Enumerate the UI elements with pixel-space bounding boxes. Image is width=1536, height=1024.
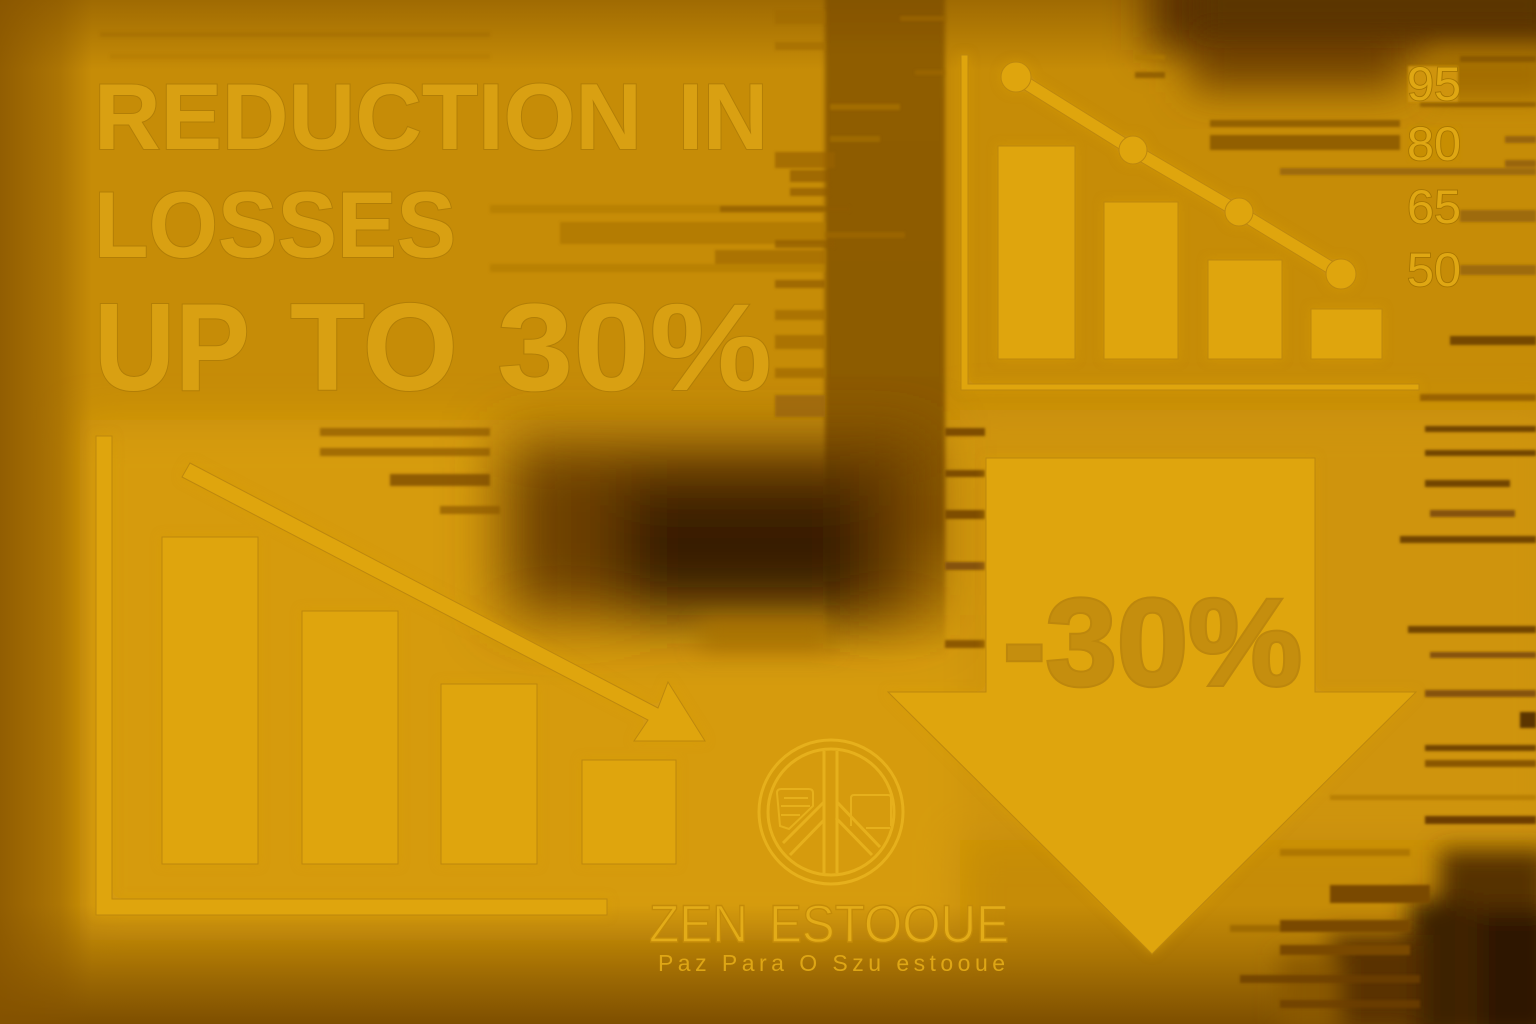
data point 4: [1326, 259, 1356, 289]
big down arrow with -30%: [888, 458, 1416, 954]
title line 2: LOSSES: [94, 172, 456, 277]
chart: declining bars with line and values: [961, 55, 1419, 390]
title line 1: IN: [678, 64, 768, 169]
title line 3: TO: [290, 279, 458, 417]
brand name: [649, 895, 1009, 954]
chart: declining bars with trend arrow: [96, 436, 705, 915]
value 95: 95: [1407, 57, 1461, 110]
bar 4: [1311, 309, 1382, 359]
axes: [96, 436, 607, 915]
ring band: [764, 744, 898, 880]
bar 2: [1104, 202, 1178, 359]
value 50: 50: [1407, 243, 1461, 296]
logo: peace sign emblem: [759, 740, 903, 884]
value 65: 65: [1407, 180, 1461, 233]
streaks center-right: [945, 428, 985, 436]
peace sign: [783, 751, 880, 873]
streaks upper left/middle: [100, 32, 490, 37]
data point 2: [1119, 136, 1147, 164]
brand name: ESTOOUE: [769, 895, 1009, 954]
axes: [961, 55, 1419, 390]
title line 1: REDUCTION: [94, 64, 642, 169]
bottom right block edges: [1330, 885, 1430, 903]
streaks lower left: [320, 428, 490, 436]
shelf icon: [777, 789, 813, 829]
bar 2: [302, 611, 398, 864]
streaks upper right: [1135, 55, 1165, 60]
outer ring: [759, 740, 903, 884]
title: [94, 64, 772, 417]
bar 1: [998, 146, 1075, 359]
title line 3: UP: [94, 279, 250, 417]
streaks in column: [830, 104, 900, 110]
title line 3: [94, 279, 772, 417]
brand name: ZEN: [649, 895, 748, 954]
data point 1: [1001, 62, 1031, 92]
trend line: [1012, 72, 1345, 279]
arrow shape: [888, 458, 1416, 954]
value 80: 80: [1407, 117, 1461, 170]
arrow label: -30%: [1003, 574, 1302, 712]
box icon: [851, 795, 891, 828]
value labels: [1407, 57, 1461, 296]
bar 4: [582, 760, 676, 864]
bar 1: [162, 537, 258, 864]
data point 3: [1225, 198, 1253, 226]
bar 3: [441, 684, 537, 864]
bar 3: [1208, 260, 1282, 359]
light boxes behind numbers: [1408, 66, 1458, 102]
arrow: downward trend: [182, 463, 705, 741]
tagline: Paz Para O Szu estooue: [658, 950, 1005, 976]
inner ring: [768, 749, 894, 875]
title line 3: 30%: [497, 279, 772, 417]
